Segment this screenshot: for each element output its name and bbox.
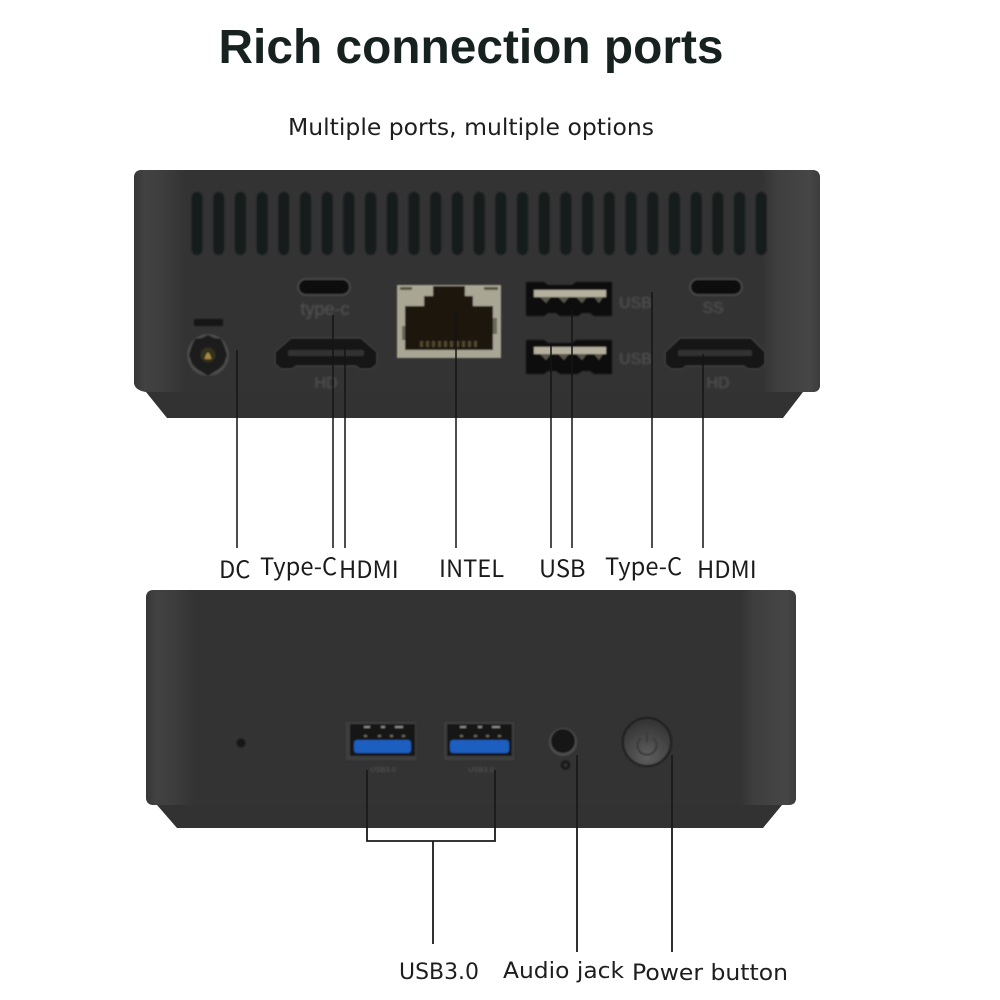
HDMI port left bbox=[275, 338, 377, 369]
device body: rear bbox=[134, 170, 820, 418]
label: DC: DC bbox=[219, 551, 250, 585]
leader lines: rear ports bbox=[237, 292, 703, 548]
Ethernet port bbox=[397, 285, 501, 358]
silk label: USB 3.0 right: USB3.0 bbox=[468, 765, 494, 774]
panel: front of mini PC bbox=[146, 590, 796, 828]
silk labels: USB bbox=[619, 295, 652, 368]
silk label: USB 3.0 left: USB3.0 bbox=[370, 765, 396, 774]
silk labels: USB: USB bbox=[619, 295, 652, 312]
silk labels: USB: USB bbox=[619, 351, 652, 368]
HDMI port right bbox=[665, 338, 765, 369]
silk label: type-c: type-c bbox=[300, 299, 350, 319]
USB 3.0 port 2 bbox=[444, 722, 514, 760]
silk label: HD right: HD bbox=[706, 375, 730, 392]
vent slots bbox=[192, 192, 767, 255]
status LED bbox=[236, 738, 246, 748]
USB 3.0 port 1 bbox=[346, 722, 416, 760]
leader line: audio jack bbox=[576, 755, 578, 952]
power button bbox=[623, 718, 671, 766]
DC jack bbox=[187, 319, 229, 376]
leader line: power button bbox=[671, 755, 673, 952]
label: Power button: Power button bbox=[632, 961, 788, 986]
USB-A stacked ports bbox=[526, 282, 612, 374]
silk label: SS: SS bbox=[702, 300, 724, 317]
audio jack bbox=[549, 728, 577, 768]
panel: rear of mini PC bbox=[134, 170, 820, 418]
bracket leader: USB3.0 bbox=[367, 770, 495, 944]
label: Audio jack: Audio jack bbox=[503, 959, 624, 984]
silk label: HD: HD bbox=[314, 375, 338, 392]
label: INTEL: INTEL bbox=[439, 550, 504, 584]
label: USB: USB bbox=[539, 550, 586, 584]
USB-C port right bbox=[690, 279, 742, 295]
label: USB3.0: USB3.0 bbox=[399, 960, 479, 985]
label: Type-C right: Type-C bbox=[605, 548, 682, 582]
label: Type-C left: Type-C bbox=[260, 548, 337, 582]
title: Rich connection ports bbox=[218, 21, 724, 74]
subtitle: Multiple ports, multiple options bbox=[288, 115, 654, 141]
label: HDMI right: HDMI bbox=[697, 551, 757, 585]
device body: front bbox=[146, 590, 796, 828]
rear port labels bbox=[219, 548, 757, 585]
label: HDMI left: HDMI bbox=[339, 551, 399, 585]
USB-C port left bbox=[298, 279, 350, 295]
